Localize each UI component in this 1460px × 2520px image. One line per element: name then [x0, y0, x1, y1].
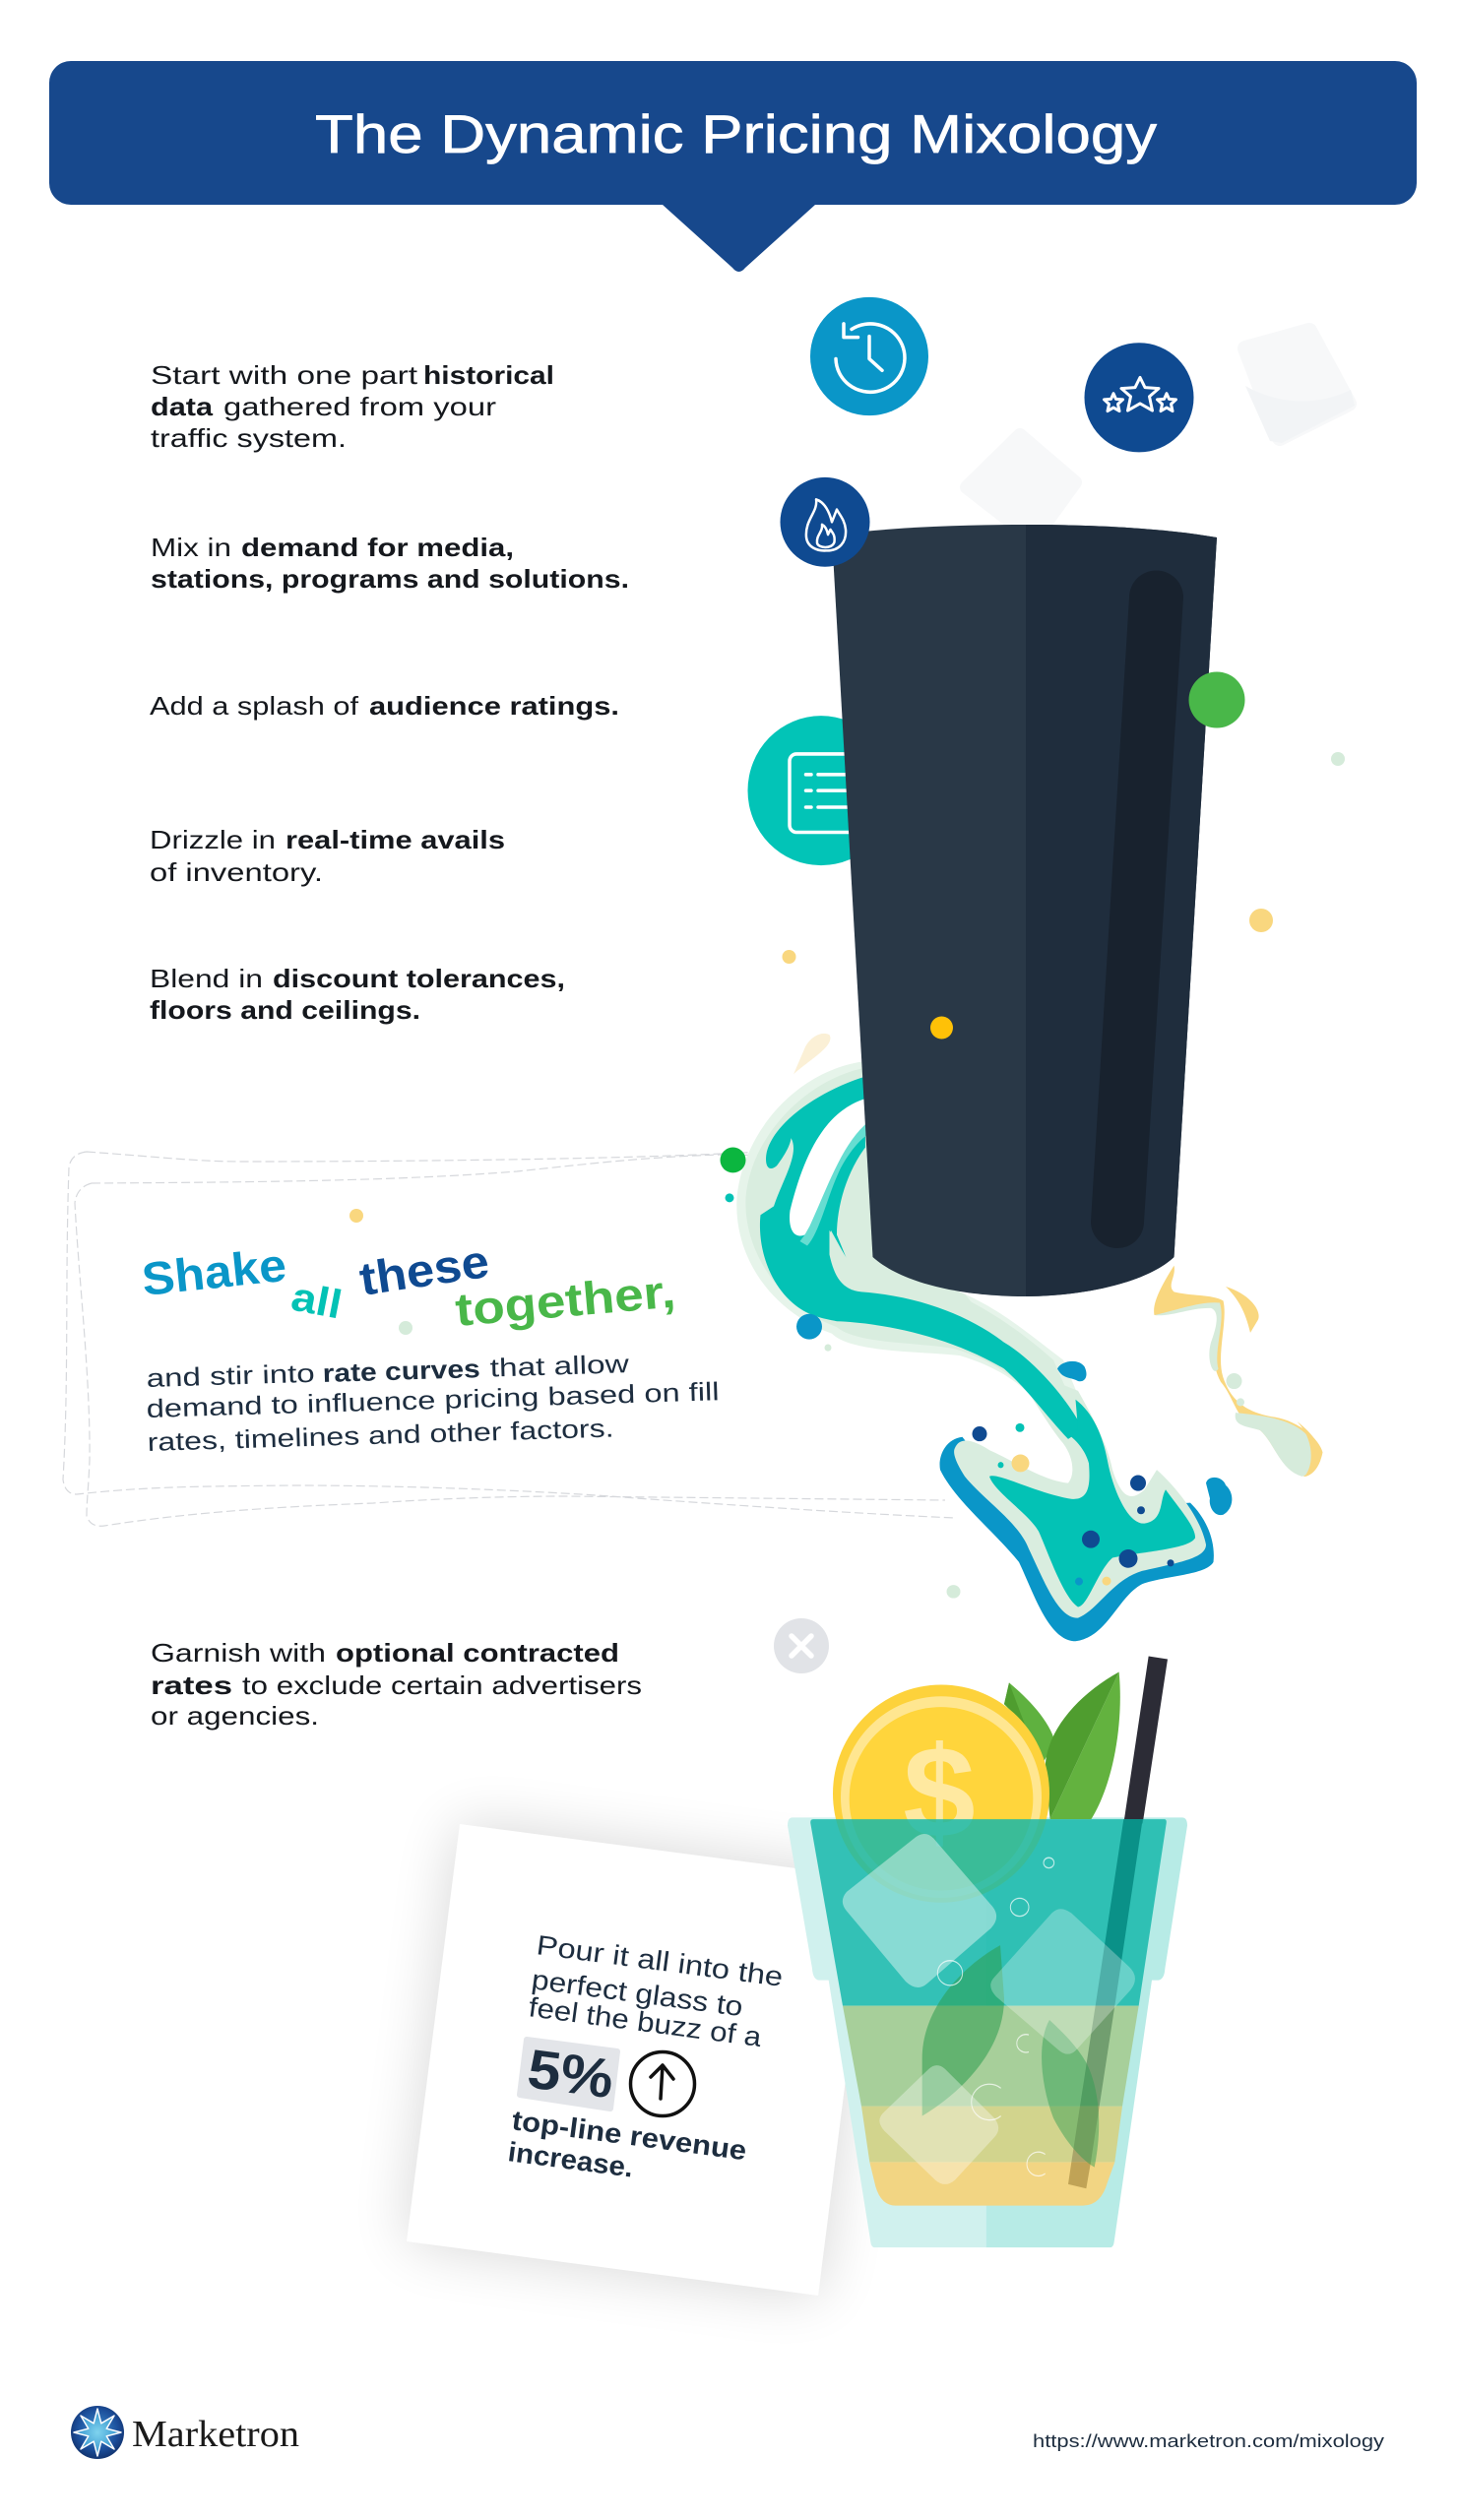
garnish text: optional contracted [336, 1638, 619, 1668]
card: pour text: increase. [506, 2136, 635, 2183]
step 4 text: Drizzle in [150, 825, 276, 854]
ice cubes behind shaker [967, 331, 1355, 539]
icon: x circle [774, 1618, 829, 1673]
card: pour text: top-line revenue [510, 2105, 748, 2166]
step 5 text: Blend in [150, 964, 263, 993]
icon: stars circle [1085, 343, 1193, 452]
teal stream [760, 1077, 1083, 1439]
step 2 text: stations, programs and solutions. [151, 564, 629, 594]
step 5 text [150, 964, 565, 1025]
shake heading: these [356, 1234, 492, 1305]
shake paragraph: demand to influence pricing based on fill [146, 1376, 720, 1423]
pale inner [830, 1145, 1004, 1343]
shake paragraph [146, 1349, 720, 1457]
garnish text [151, 1638, 642, 1731]
splash [721, 1034, 1323, 1641]
5% badge: 5% [524, 2037, 617, 2110]
puddle pale [954, 1373, 1206, 1618]
step 4 text [150, 825, 505, 887]
step 2 text [151, 533, 629, 594]
card: pour text: perfect glass to [530, 1964, 744, 2022]
shake paragraph: that allow [489, 1349, 629, 1382]
title banner: The Dynamic Pricing Mixology [315, 103, 1158, 164]
step 1 text [151, 360, 554, 453]
submerged straw [1096, 1819, 1143, 2006]
icon: list circle [748, 716, 894, 865]
splash droplets [721, 1148, 1232, 1599]
step 4 text: of inventory. [150, 857, 323, 887]
step 3 text: Add a splash of [150, 691, 359, 721]
shake paragraph: rate curves [322, 1354, 480, 1388]
light teal stripe [799, 1123, 866, 1246]
marketron logo: Marketron [132, 2414, 299, 2455]
step 3 text: audience ratings. [369, 691, 619, 721]
ice cubes [843, 1834, 996, 1987]
step 2 text: demand for media, [241, 533, 514, 562]
puddle teal [989, 1400, 1195, 1606]
right wisp [1154, 1266, 1323, 1477]
marketron logo [71, 2406, 299, 2459]
step 2 text: Mix in [151, 533, 231, 562]
coin dollar sign: $ [903, 1720, 976, 1864]
step 3 text [150, 691, 619, 721]
step 5 text: floors and ceilings. [150, 995, 420, 1025]
garnish text: or agencies. [151, 1701, 319, 1731]
shake paragraph: and stir into [146, 1358, 315, 1393]
cocktail glass [788, 1656, 1187, 2247]
garnish text: to exclude certain advertisers [242, 1670, 642, 1700]
icon: clock circle [810, 297, 928, 415]
shake heading: all [287, 1274, 346, 1328]
shaker [832, 525, 1217, 1296]
step 1 text: historical [423, 360, 554, 390]
step 1 text: data [151, 392, 214, 421]
bubbles [937, 1858, 1054, 2175]
puddle outer [940, 1437, 1214, 1641]
shake heading: together, [453, 1265, 677, 1336]
decorative dots [349, 671, 1345, 1335]
title banner [49, 61, 1417, 272]
card: pour text: feel the buzz of a [527, 1991, 764, 2052]
white hole [790, 1099, 866, 1235]
straw [1123, 1656, 1168, 1823]
shake heading [140, 1234, 677, 1336]
back leaves [1004, 1682, 1055, 1762]
liquid layers [810, 1819, 1167, 2006]
step 4 text: real-time avails [286, 825, 505, 854]
source url: https://www.marketron.com/mixology [1033, 2431, 1384, 2451]
step 1 text: gathered from your [223, 392, 496, 421]
garnish text: Garnish with [151, 1638, 326, 1668]
icon: up arrow [630, 2051, 695, 2116]
step 1 text: traffic system. [151, 423, 347, 453]
cream droplet [793, 1034, 830, 1074]
pale splash shell [736, 1061, 1078, 1426]
icon: flame circle [780, 477, 870, 567]
card: pour text [407, 1824, 871, 2296]
step 1 text: Start with one part [151, 360, 418, 390]
glass body [788, 1817, 986, 2247]
card: pour text: Pour it all into the [535, 1929, 785, 1992]
garnish text: rates [151, 1670, 232, 1700]
shake paragraph: rates, timelines and other factors. [147, 1414, 614, 1457]
dashed frames [63, 1148, 955, 1526]
shake heading: Shake [140, 1238, 288, 1305]
coin [833, 1685, 1049, 1903]
submerged leaves [922, 1945, 1004, 2116]
step 5 text: discount tolerances, [273, 964, 565, 993]
